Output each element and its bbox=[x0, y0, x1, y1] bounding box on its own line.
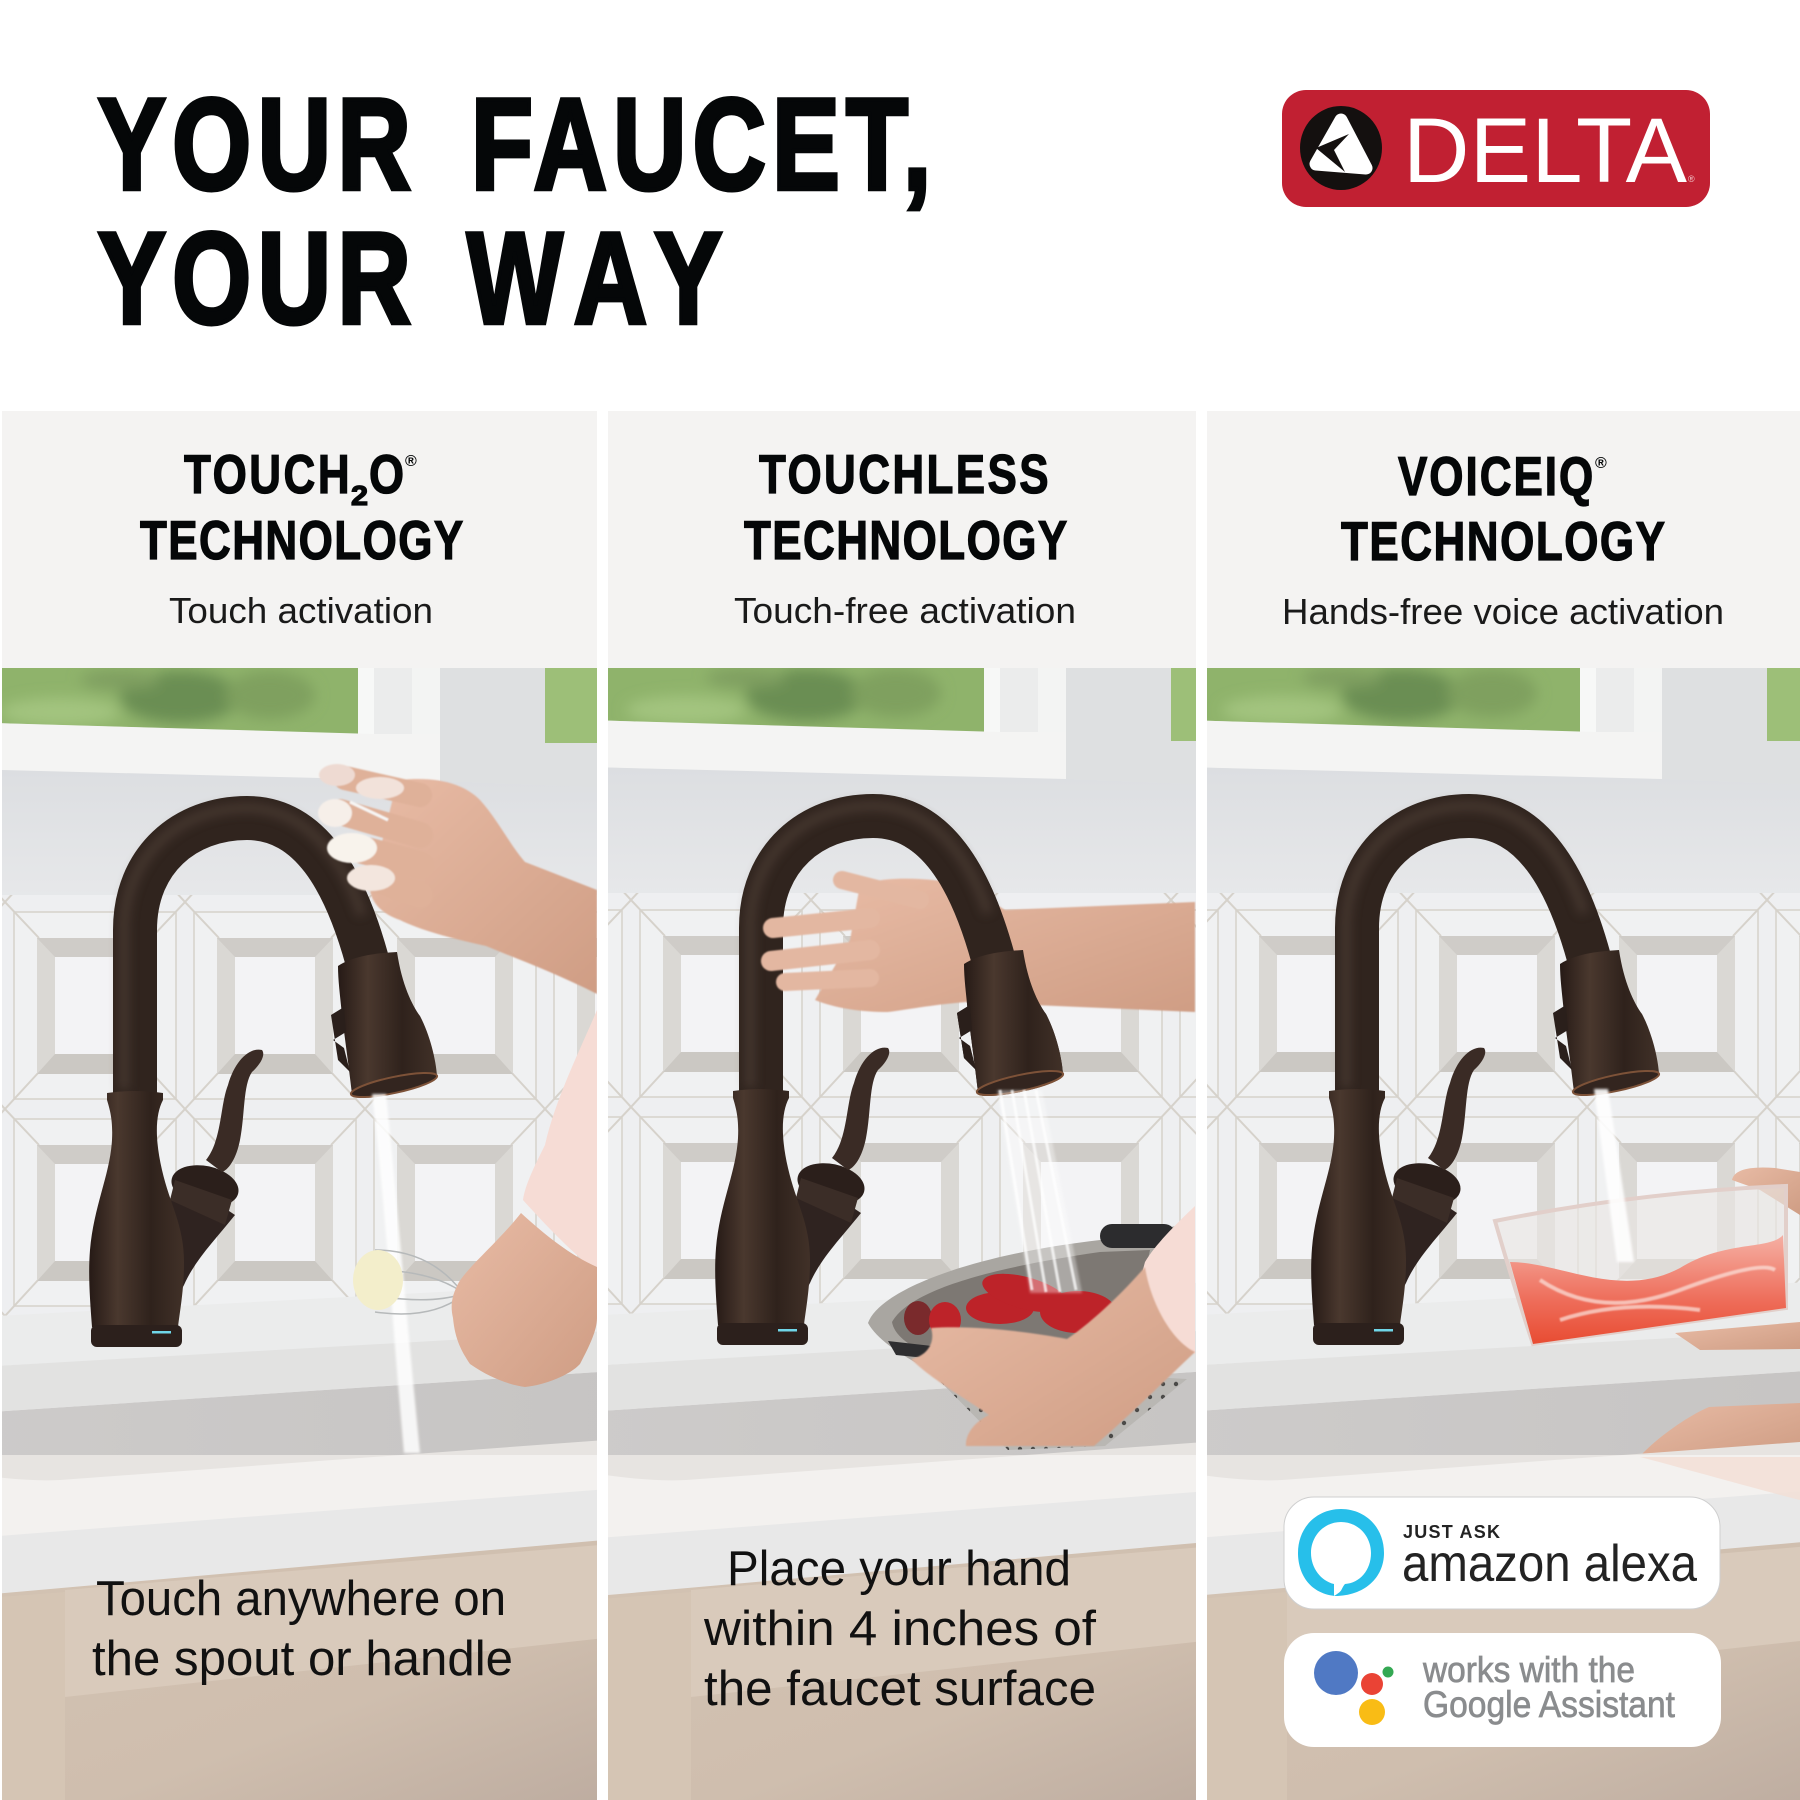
heading: VoiceIQ technology: ® bbox=[1595, 455, 1607, 472]
panel: voice photo bbox=[1182, 666, 1800, 1800]
hand on counter bbox=[1640, 1403, 1800, 1456]
subheading: Touch activation bbox=[169, 590, 433, 631]
subheading: Touch-free activation bbox=[734, 590, 1076, 631]
caption: touchless bbox=[703, 1542, 1096, 1716]
glass bowl bbox=[1495, 1186, 1786, 1344]
Alexa wordmark: JUST ASK bbox=[1403, 1522, 1500, 1542]
sleeve bbox=[1139, 1206, 1195, 1354]
hand touching spout bbox=[318, 764, 597, 994]
caption: touchless: Place your hand bbox=[727, 1542, 1071, 1596]
icon: Google dots bbox=[1314, 1651, 1394, 1725]
panel: VoiceIQ technology header bbox=[1207, 411, 1800, 669]
badge: Google Assistant bbox=[1284, 1633, 1721, 1747]
heading: Touchless technology: TECHNOLOGY bbox=[744, 509, 1067, 571]
strawberries bbox=[904, 1274, 1112, 1335]
spray of water bbox=[997, 1090, 1082, 1293]
title: FAUCET, bbox=[471, 71, 931, 217]
icon: Alexa ring bbox=[1298, 1509, 1384, 1596]
subheading: Hands-free voice activation bbox=[1282, 591, 1724, 632]
caption: touch bbox=[92, 1572, 513, 1686]
water stream bbox=[372, 1094, 420, 1453]
heading: Touch2O technology bbox=[140, 443, 463, 571]
heading: VoiceIQ technology: TECHNOLOGY bbox=[1341, 510, 1665, 572]
icon: Delta emblem bbox=[1300, 106, 1382, 190]
Google wordmark: Google Assistant bbox=[1423, 1684, 1676, 1725]
caption: touch: Touch anywhere on bbox=[96, 1572, 506, 1626]
Google wordmark: works with the bbox=[1422, 1649, 1635, 1690]
title: YOUR bbox=[98, 71, 411, 217]
caption: touch: the spout or handle bbox=[92, 1632, 513, 1686]
heading: VoiceIQ technology bbox=[1341, 445, 1665, 572]
badge: Amazon Alexa bbox=[1284, 1497, 1720, 1609]
heading: Touch2O technology: TOUCH bbox=[184, 443, 350, 505]
panel: Touch2O technology header bbox=[2, 411, 597, 669]
logo registered mark: ® bbox=[1688, 174, 1695, 184]
whisk bbox=[353, 1250, 462, 1314]
caption: touchless: the faucet surface bbox=[704, 1662, 1096, 1716]
heading: Touchless technology: TOUCHLESS bbox=[759, 443, 1049, 505]
heading: Touch2O technology: TECHNOLOGY bbox=[140, 509, 463, 571]
title: YOUR bbox=[98, 205, 411, 351]
panel: touchless photo bbox=[608, 668, 1196, 1800]
logo: Delta bbox=[1282, 90, 1710, 207]
hand holding bowl bbox=[911, 1267, 1195, 1446]
fist bbox=[452, 1213, 597, 1387]
fingers holding glass bowl bbox=[1675, 1168, 1800, 1350]
sleeve bbox=[523, 1010, 597, 1272]
Google wordmark bbox=[1422, 1649, 1676, 1725]
Alexa wordmark: amazon alexa bbox=[1402, 1535, 1697, 1593]
hand reflection bbox=[1640, 1457, 1800, 1500]
logo wordmark: DELTA bbox=[1403, 100, 1688, 202]
heading: Touch2O technology: 2 bbox=[351, 480, 368, 511]
caption: touchless: within 4 inches of bbox=[703, 1602, 1096, 1656]
heading: Touch2O technology: O bbox=[369, 443, 404, 505]
heading: VoiceIQ technology: VOICEIQ bbox=[1398, 445, 1593, 507]
heading: Touch2O technology: ® bbox=[405, 453, 417, 470]
water stream bbox=[1594, 1089, 1634, 1262]
arm and open hand bbox=[771, 879, 1195, 1012]
title: WAY bbox=[467, 205, 722, 351]
spout head in front of hand bbox=[905, 798, 1064, 1096]
title bbox=[98, 71, 931, 351]
panel: Touchless technology header bbox=[608, 411, 1196, 669]
heading: Touchless technology bbox=[744, 443, 1067, 571]
panel: touch photo bbox=[0, 668, 660, 1800]
colander bowl bbox=[868, 1224, 1187, 1450]
